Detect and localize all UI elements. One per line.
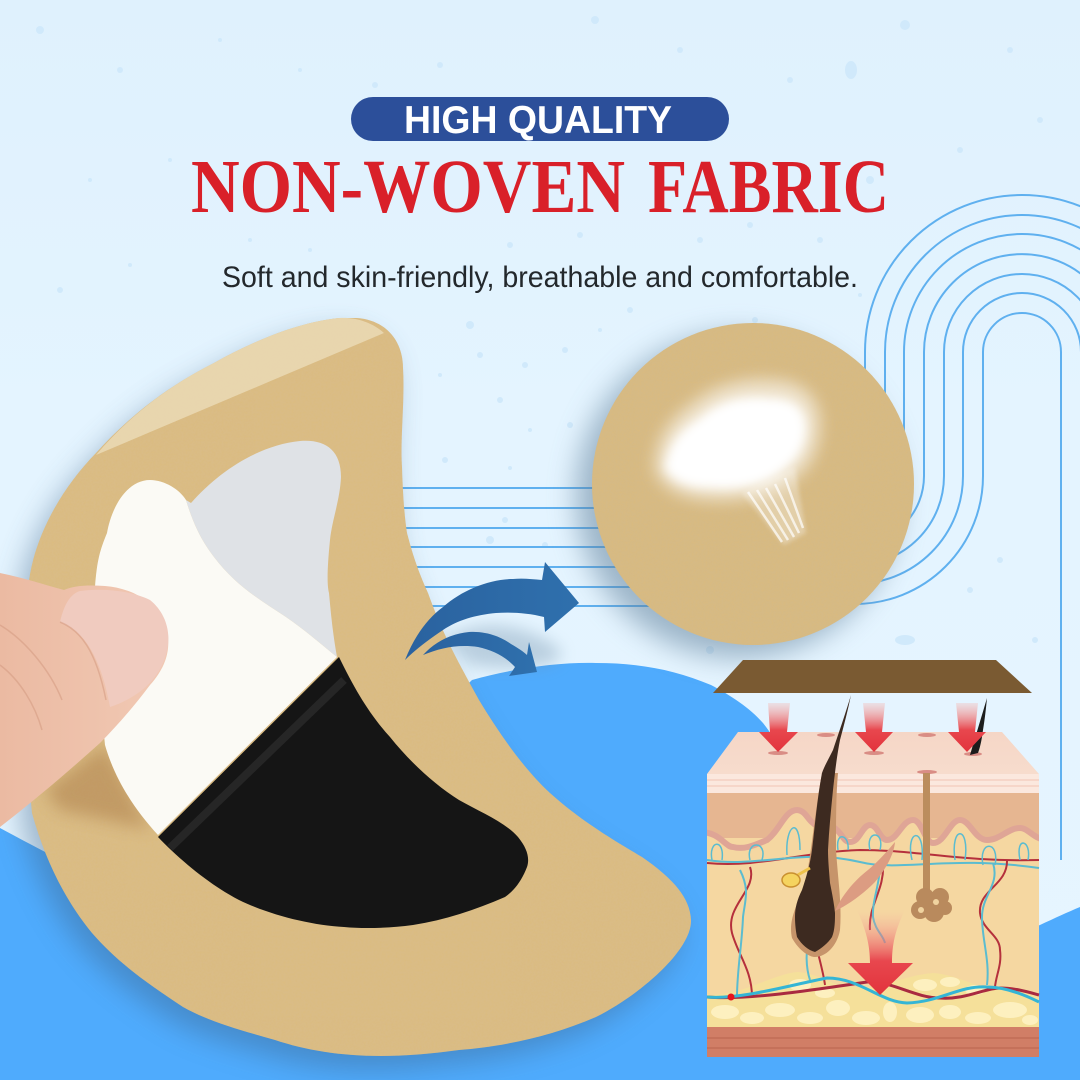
fat layer xyxy=(707,972,1039,1027)
patch strip xyxy=(713,660,1032,693)
white peeled liner xyxy=(94,480,337,835)
skin cross-section diagram xyxy=(700,660,1045,1057)
sebaceous gland xyxy=(782,868,810,887)
muscle layer xyxy=(707,1027,1039,1057)
red arrows down xyxy=(759,703,986,995)
fold line on black pad xyxy=(170,680,344,848)
hair follicle sheath xyxy=(791,773,841,957)
white fibres burst xyxy=(655,380,820,545)
hand holding patch xyxy=(0,573,168,827)
blood vessels xyxy=(707,828,1039,997)
epidermis front xyxy=(707,774,1039,793)
dermis xyxy=(707,793,1039,853)
second hair xyxy=(970,698,987,755)
heading group xyxy=(191,97,889,294)
magnified fabric circle xyxy=(576,323,914,658)
blue wave background shape xyxy=(0,663,1080,1080)
black gel pad xyxy=(158,657,528,928)
subtitle: Soft and skin-friendly, breathable and comfortable. xyxy=(222,261,858,294)
title: FABRIC xyxy=(648,145,889,229)
skin pores xyxy=(768,733,982,774)
patch texture xyxy=(20,315,695,1060)
title: NON-WOVEN xyxy=(191,145,625,229)
sweat gland xyxy=(911,773,952,922)
badge: high quality: HIGH QUALITY xyxy=(404,99,672,142)
arrow shadow xyxy=(445,626,561,668)
fat cells xyxy=(711,977,1038,1025)
patch shadow xyxy=(17,332,681,1070)
red dot xyxy=(728,994,734,1000)
moon shaped patch xyxy=(17,315,695,1070)
patch body xyxy=(27,318,691,1056)
translucent corner strip xyxy=(96,318,384,455)
thumbnail xyxy=(60,590,168,707)
deep vessels xyxy=(707,978,1039,1003)
blue curved arrows xyxy=(405,562,579,676)
background speckles xyxy=(36,16,1043,654)
decorative concentric line pattern xyxy=(402,195,1080,860)
hair and bulb xyxy=(795,695,851,952)
thumb fold lines xyxy=(0,622,106,730)
muscle strand xyxy=(835,842,895,911)
skin top surface xyxy=(707,732,1039,774)
circle shadow xyxy=(576,334,900,658)
grey liner backing xyxy=(186,441,341,657)
finger shadow on patch xyxy=(45,745,150,830)
